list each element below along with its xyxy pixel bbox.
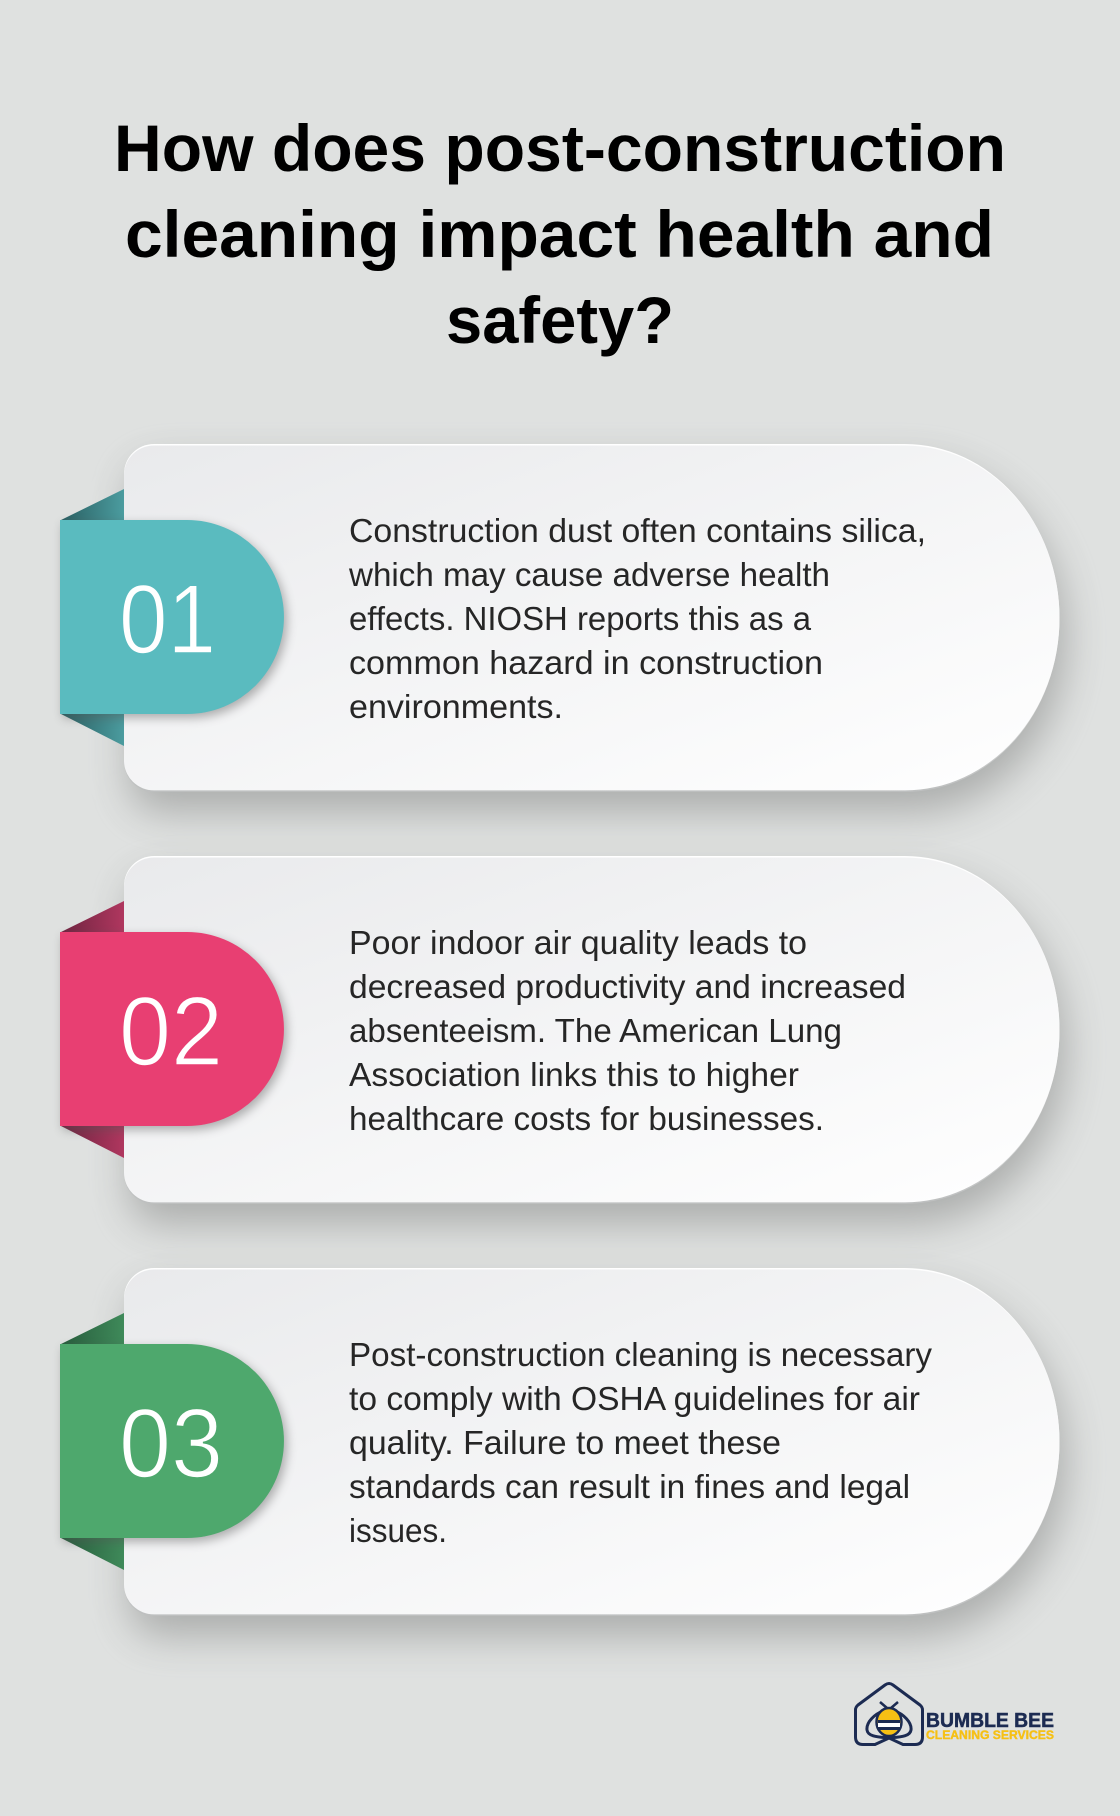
panel: card 02 xyxy=(60,856,1066,1224)
panel: card 03 xyxy=(60,1268,1066,1636)
text: card 03 body: to comply with OSHA guidelines for air xyxy=(349,1380,920,1417)
text: card 01 body: Construction dust often contains silica, xyxy=(349,512,926,549)
text: card 01 body: effects. NIOSH reports this as a xyxy=(349,600,812,637)
text: card 03 body xyxy=(349,1336,932,1549)
text: card 02 body: Association links this to higher xyxy=(349,1056,799,1093)
text: card 03 body: quality. Failure to meet these xyxy=(349,1424,781,1461)
text: card 01 body xyxy=(348,512,926,725)
fold: pink ribbon xyxy=(61,901,124,1158)
text: card 02 body: decreased productivity and increased xyxy=(349,968,906,1005)
text: card 02 body: healthcare costs for businesses. xyxy=(349,1100,824,1137)
badge: 03 xyxy=(60,1344,284,1538)
badge: 02 xyxy=(60,932,284,1126)
text: card 01 body: which may cause adverse health xyxy=(348,556,830,593)
number 02: 02 xyxy=(119,976,223,1086)
logo: Bumble Bee Cleaning Services xyxy=(856,1684,1054,1744)
text: card 02 body: absenteeism. The American Lung xyxy=(349,1012,842,1049)
text: card 02 body xyxy=(349,924,906,1137)
icon: house with bee xyxy=(856,1684,922,1744)
number 03: 03 xyxy=(119,1388,223,1498)
text: card 03 body: issues. xyxy=(349,1512,447,1549)
title xyxy=(114,111,1006,357)
fold: green ribbon xyxy=(61,1313,124,1570)
text: card 01 body: common hazard in construction xyxy=(349,644,823,681)
badge: 01 xyxy=(60,520,284,714)
fold: teal ribbon xyxy=(61,489,124,746)
text: card 03 body: Post-construction cleaning is necessary xyxy=(349,1336,932,1373)
logo tagline: CLEANING SERVICES xyxy=(926,1728,1054,1742)
number 01: 01 xyxy=(119,564,216,674)
text: card 03 body: standards can result in fines and legal xyxy=(349,1468,910,1505)
title: How does post-construction xyxy=(114,111,1006,185)
logo wordmark: BUMBLE BEE xyxy=(926,1710,1054,1732)
title: cleaning impact health and xyxy=(125,197,994,271)
panel: card 01 xyxy=(60,444,1066,812)
text: card 02 body: Poor indoor air quality leads to xyxy=(349,924,807,961)
text: card 01 body: environments. xyxy=(349,688,563,725)
title: safety? xyxy=(446,283,674,357)
